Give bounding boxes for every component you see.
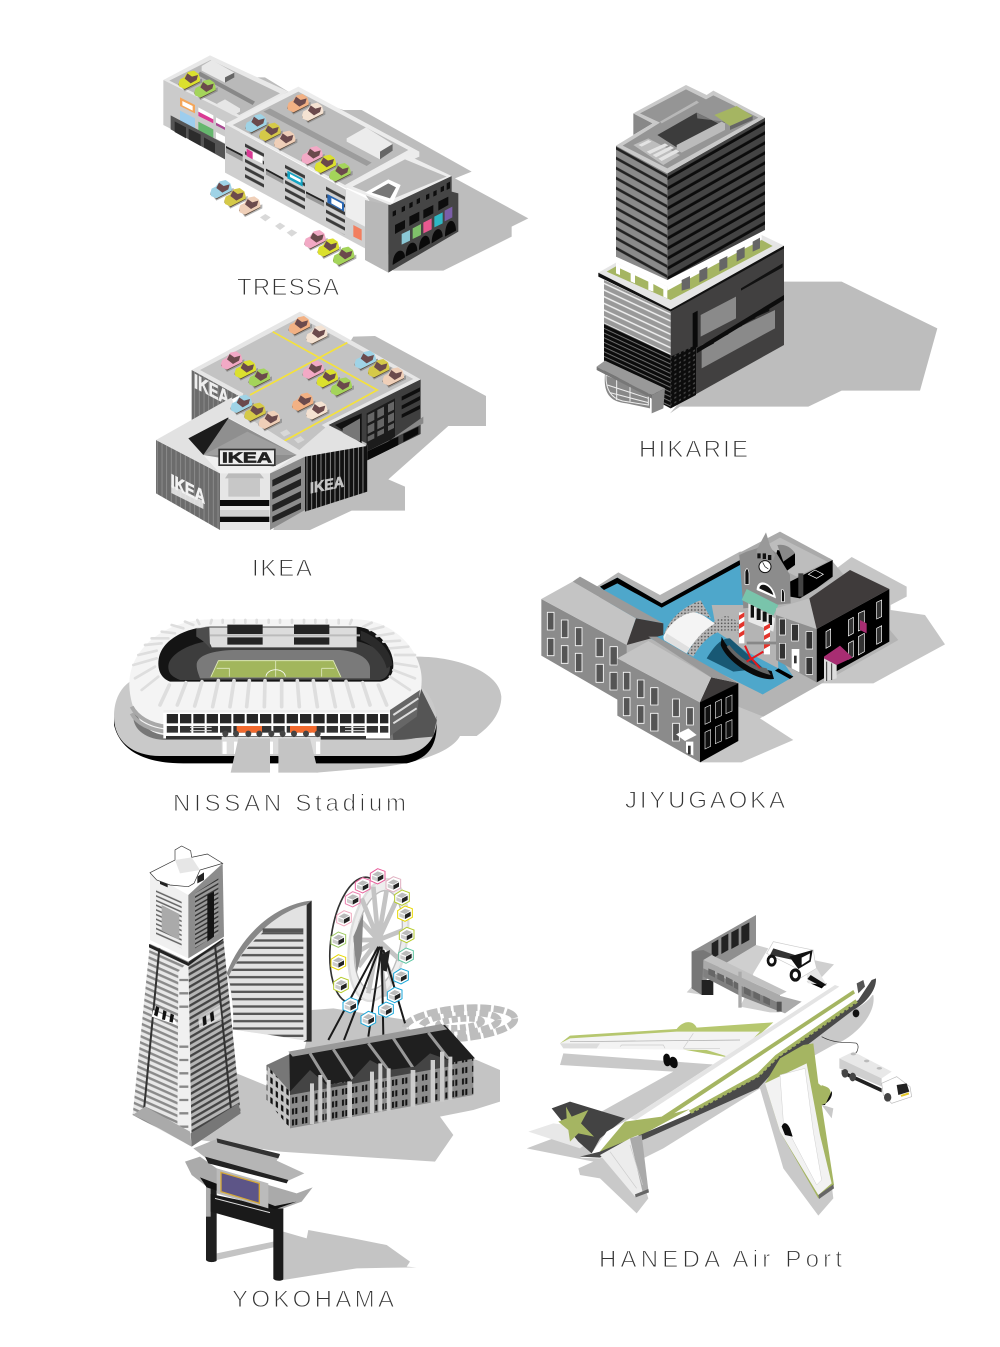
tower (616, 85, 765, 280)
stands body (129, 619, 422, 736)
right building (776, 570, 889, 682)
Landmark Tower (133, 846, 241, 1147)
left engine (663, 1054, 678, 1068)
building: IKEA (156, 312, 486, 530)
shadow: IKEA (273, 336, 486, 530)
left wing (560, 1022, 773, 1058)
landmark group: YOKOHAMA (133, 846, 516, 1281)
entrance stairs (222, 731, 321, 773)
shadows: YOKOHAMA (200, 1004, 516, 1280)
building: JIYUGAOKA (541, 532, 945, 762)
Red Brick Warehouse (267, 1024, 475, 1128)
striped poles (739, 612, 778, 654)
tail fin (528, 1102, 625, 1153)
roof ribs (133, 620, 417, 707)
Ferris wheel (322, 869, 417, 1040)
shadow: TRESSA (255, 77, 528, 271)
main block (225, 87, 419, 248)
Queen's Square building (227, 901, 312, 1042)
front block (156, 397, 367, 530)
clock tower and rear building (738, 532, 833, 608)
left wing (163, 55, 288, 159)
plaza and canal (597, 552, 898, 717)
building: NISSAN Stadium (114, 619, 501, 773)
jet bridge (687, 915, 834, 1013)
label: IKEA: IKEA (252, 555, 312, 582)
sign: IKEA roof: IKEA (222, 451, 273, 467)
sign: IKEA roof (218, 449, 276, 467)
shadow: JIYUGAOKA (700, 557, 945, 762)
label: HIKARIE: HIKARIE (639, 436, 748, 463)
label: HANEDA Air Port: HANEDA Air Port (599, 1246, 842, 1273)
left building (541, 577, 663, 705)
building: HIKARIE (597, 85, 937, 413)
fuselage (580, 977, 877, 1158)
end block (346, 154, 458, 273)
shadow: stadium (297, 657, 501, 773)
label: YOKOHAMA: YOKOHAMA (232, 1286, 394, 1313)
fuel truck (822, 1037, 912, 1103)
facade (163, 710, 390, 739)
sign: IKEA right wall: IKEA (310, 474, 344, 497)
bridge (663, 600, 738, 657)
terrace (598, 235, 784, 312)
tug vehicle (767, 942, 827, 988)
front building (617, 637, 738, 762)
entrance canopy (597, 361, 665, 413)
cars: IKEA (221, 316, 406, 431)
tailplane (600, 1135, 649, 1197)
shadow: HIKARIE (670, 282, 937, 413)
label: NISSAN Stadium: NISSAN Stadium (173, 790, 406, 817)
Chinatown gate (185, 1138, 313, 1281)
gondola (721, 637, 774, 679)
label: JIYUGAOKA: JIYUGAOKA (625, 787, 785, 814)
label: TRESSA: TRESSA (237, 274, 339, 301)
roof deck (192, 312, 421, 458)
right wing (765, 1043, 834, 1199)
bowl (158, 625, 393, 682)
building: TRESSA (163, 55, 528, 273)
back building walls (192, 369, 423, 461)
base platform (114, 673, 437, 763)
lower building (604, 247, 784, 408)
canopy and columns (742, 589, 778, 632)
scene: HANEDA airport (527, 915, 912, 1216)
cars: TRESSA (179, 71, 356, 267)
sign: IKEA left wall: IKEA (171, 471, 205, 509)
plane shadow (527, 995, 874, 1216)
back building walls: IKEA (194, 369, 229, 410)
